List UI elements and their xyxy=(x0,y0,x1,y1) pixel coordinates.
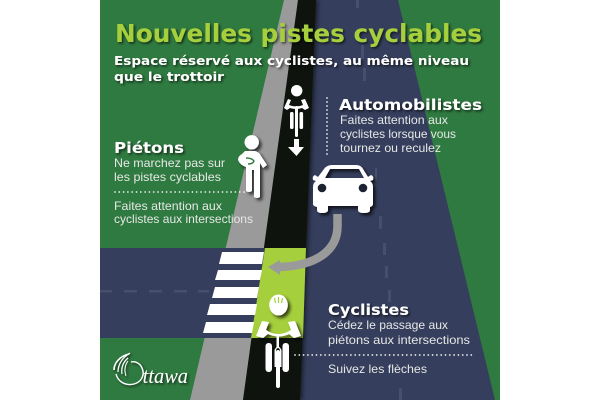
title: Nouvelles pistes cyclables xyxy=(115,19,482,48)
pietons dotted line xyxy=(115,191,245,193)
sidewalk xyxy=(190,0,298,400)
subtitle: que le trottoir xyxy=(114,70,224,84)
cyclistes dotted line xyxy=(295,354,472,356)
subtitle: Espace réservé aux cyclistes, au même niveau xyxy=(114,54,469,68)
road xyxy=(300,0,495,400)
text: pietons: cyclistes aux intersections xyxy=(114,212,253,226)
road centre dashes xyxy=(356,0,402,400)
text: automobilistes xyxy=(339,96,482,155)
cycle track xyxy=(243,0,316,400)
text: pietons: Faites attention aux xyxy=(114,199,222,213)
icon: large cyclist xyxy=(256,294,301,388)
text: cyclistes: Cyclistes xyxy=(328,301,409,319)
logo: Ottawa xyxy=(114,353,188,388)
text: automobilistes: tournez ou reculez xyxy=(340,141,441,155)
icon: small cyclist xyxy=(284,85,309,156)
green bike crossing xyxy=(251,248,306,338)
text: cyclistes: Cédez le passage aux xyxy=(328,318,448,332)
cross street dashes xyxy=(100,290,209,292)
text: pietons xyxy=(114,139,253,226)
text: cyclistes: piétons aux intersections xyxy=(328,333,470,347)
text: automobilistes: Automobilistes xyxy=(339,96,482,114)
text: pietons: Piétons xyxy=(114,139,184,157)
scene background xyxy=(100,0,500,400)
text: automobilistes: cyclistes lorsque vous xyxy=(340,127,456,141)
arrow: car turning across the track xyxy=(268,214,338,275)
crosswalk xyxy=(203,252,264,333)
text: pietons: Ne marchez pas sur xyxy=(114,156,225,170)
cross street xyxy=(100,248,265,338)
cycle track edge shadow xyxy=(296,0,318,400)
infographic xyxy=(100,0,500,400)
subtitle xyxy=(114,54,469,84)
text: pietons: les pistes cyclables xyxy=(114,170,221,184)
text: automobilistes: Faites attention aux xyxy=(340,113,448,127)
icon: down arrow xyxy=(288,139,304,156)
automobilistes dotted line xyxy=(326,98,328,158)
icon: car xyxy=(313,165,373,213)
icon: pedestrian xyxy=(238,135,267,198)
text: cyclistes: Suivez les flèches xyxy=(328,362,427,376)
text: cyclistes xyxy=(328,301,470,376)
